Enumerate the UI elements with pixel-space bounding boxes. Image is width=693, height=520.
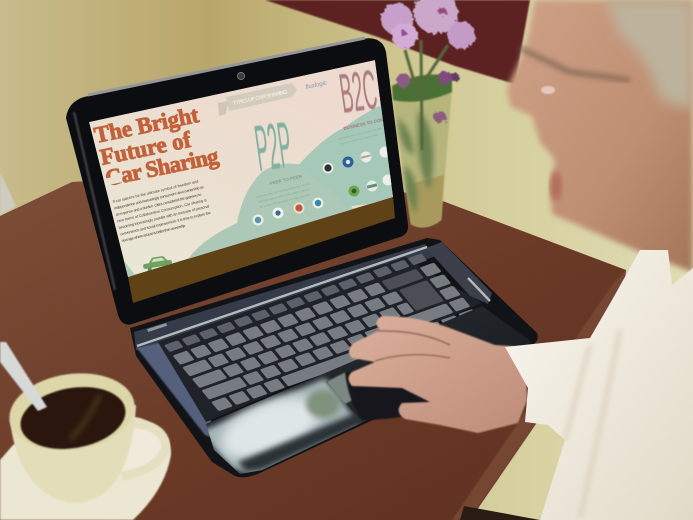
flower heads (381, 0, 475, 123)
glasses frame (520, 48, 630, 80)
intro paragraph: an expense and a burden. Cities considered the gateway to (115, 193, 202, 217)
intro paragraph: independence and increasingly consumers view ownership as (114, 185, 204, 210)
coffee cup on saucer (0, 342, 171, 520)
cup rim (4, 366, 140, 458)
coffee (16, 379, 130, 457)
intro paragraph: becoming increasingly popular with an increase of personal (118, 204, 210, 230)
coffee reflection (70, 395, 100, 440)
screen infographic (89, 59, 400, 285)
grey hair (605, 0, 693, 110)
B2C hill (299, 105, 393, 206)
keyboard keys (164, 252, 480, 411)
eye highlight (541, 86, 555, 94)
P2P description: for a short time through an online service (259, 193, 310, 209)
screen reflection band (128, 197, 395, 303)
screen background (89, 60, 393, 277)
power button (147, 323, 167, 332)
title text (92, 108, 220, 186)
right side palm dark strip (426, 242, 492, 304)
P2P description: rent their cars to others who need a vehicle (257, 187, 311, 204)
P2P hill (188, 164, 354, 259)
white object at left edge (0, 172, 16, 216)
vase with flowers (381, 0, 475, 227)
lid left highlight (74, 112, 115, 290)
man's face (507, 0, 693, 272)
lips (550, 171, 562, 201)
face and neck (507, 0, 693, 272)
vase green rim (392, 74, 452, 102)
saucer (0, 417, 171, 520)
cup body (10, 405, 136, 503)
shirt (505, 250, 693, 520)
deck left blue side (137, 343, 230, 445)
vase leaves (398, 110, 433, 215)
laptop base (130, 238, 538, 477)
palm rest (206, 306, 532, 474)
finger gaps (375, 331, 450, 361)
brand logo: fluxlogic (305, 81, 328, 91)
B2C subtitle: BUSINESS TO CONSUMER (343, 113, 400, 131)
intro paragraph: new age where access is better than ownership. (121, 224, 186, 243)
left hill (124, 260, 135, 277)
title text: Car Sharing (103, 143, 221, 191)
lid top highlight (88, 38, 365, 95)
P2P icons (252, 198, 324, 226)
laptop (66, 38, 538, 478)
spoon (0, 342, 47, 411)
vase water lower (406, 175, 444, 227)
B2C description: them to members for hourly rental (339, 133, 378, 146)
laptop lid (66, 38, 408, 325)
green car icon (143, 256, 172, 271)
ribbon header (218, 83, 297, 116)
title text: Future of (98, 127, 193, 170)
shirt body and sleeve (505, 250, 693, 520)
table top (0, 170, 626, 520)
vase glass (393, 90, 452, 227)
B2C heading: B2C (336, 59, 381, 125)
trackpad (326, 372, 445, 421)
P2P subtitle: PEER TO PEER (269, 173, 303, 186)
mouse (345, 372, 448, 420)
silver strip above keyboard (137, 247, 490, 346)
maroon ledge behind flowers (265, 0, 530, 84)
trackpad light corner (326, 372, 356, 404)
intro paragraph: new forms of Collaborative Consumption, Car sharing is (117, 198, 207, 223)
B2C description: Companies own a fleet of cars and offer (337, 126, 383, 141)
cup handle (122, 423, 166, 476)
title text: The Bright (92, 102, 201, 148)
deck upper strip (134, 244, 436, 352)
white patch over title (104, 178, 122, 186)
intro paragraph: convenience and social improvement. It is time to explore the (120, 211, 211, 236)
intro paragraph: If car sales're be the ultimate symbol of freedom and (112, 180, 199, 204)
P2P heading: P2P (251, 110, 296, 186)
dark floor under table (460, 506, 540, 520)
sleeve fold (565, 330, 620, 518)
flower stems (405, 40, 448, 150)
P2P description (256, 183, 310, 208)
keyboard well (158, 257, 482, 422)
table front edge (452, 270, 626, 520)
palm rest reflection (200, 378, 372, 478)
hand on mouse (345, 316, 527, 433)
P2P description: A peer-to-peer car sharing model lets owners (255, 181, 311, 199)
ribbon header: TYPES OF CAR SHARING (232, 89, 288, 107)
intro paragraph (112, 180, 211, 243)
webcam (237, 72, 245, 80)
B2C icons (322, 146, 394, 196)
hand palm and thumb (348, 316, 527, 433)
